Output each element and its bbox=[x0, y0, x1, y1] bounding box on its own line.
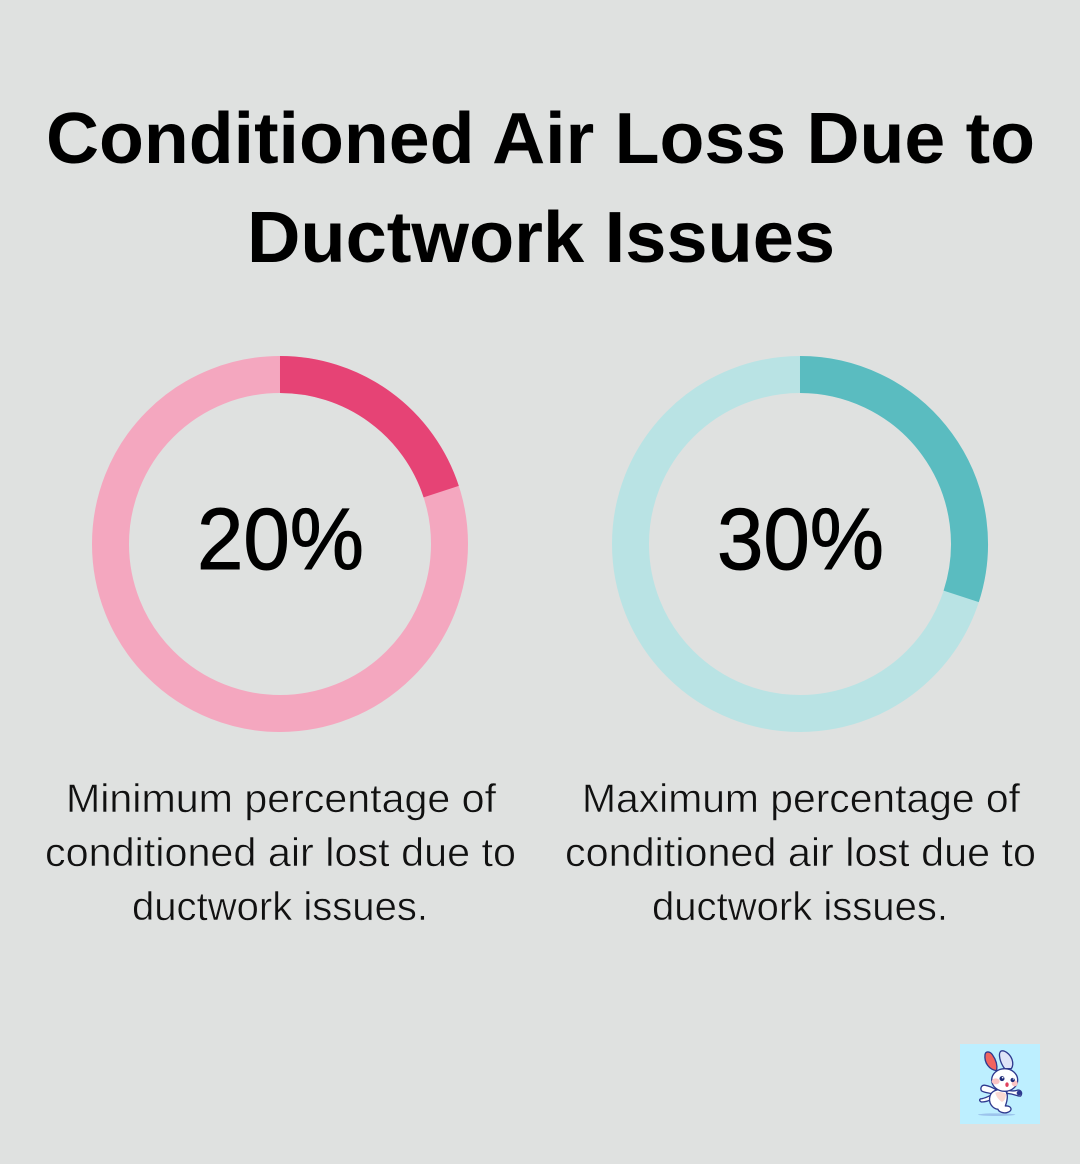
panel: minimum 20% bbox=[45, 374, 516, 929]
donut chart: 30% bbox=[630, 374, 970, 714]
description: minimum: Minimum percentage of bbox=[66, 777, 497, 821]
description: maximum: ductwork issues. bbox=[652, 885, 948, 929]
panel: maximum 30% bbox=[565, 374, 1036, 929]
description: minimum: conditioned air lost due to bbox=[45, 831, 516, 875]
description: minimum bbox=[45, 777, 516, 929]
icon: rabbit logo bbox=[960, 1044, 1040, 1124]
donut chart: 20% bbox=[110, 374, 450, 714]
title: Conditioned Air Loss Due to bbox=[46, 99, 1035, 179]
value: 30%: 30% bbox=[717, 491, 884, 588]
description: minimum: ductwork issues. bbox=[132, 885, 428, 929]
title bbox=[46, 99, 1035, 278]
title: Ductwork Issues bbox=[247, 198, 835, 278]
description: maximum: Maximum percentage of bbox=[582, 777, 1021, 821]
description: maximum bbox=[565, 777, 1036, 929]
description: maximum: conditioned air lost due to bbox=[565, 831, 1036, 875]
value: 20%: 20% bbox=[197, 491, 364, 588]
